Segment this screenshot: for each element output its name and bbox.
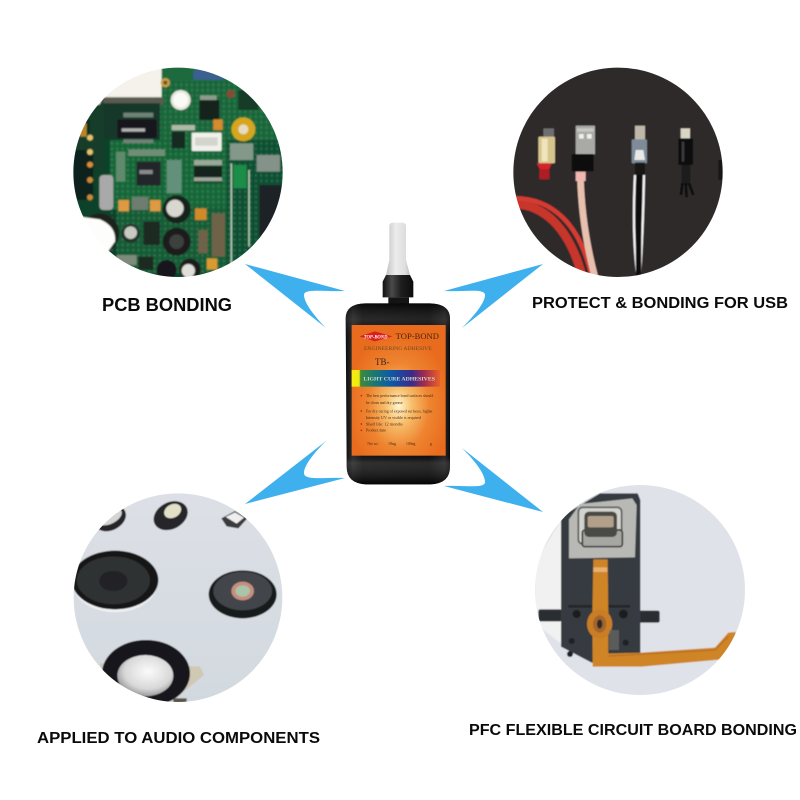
nozzle: [386, 223, 410, 275]
label subtitle: ENGINEERING ADHESIVE: [364, 347, 432, 352]
label bullets: Product date: [366, 429, 386, 433]
band title: LIGHT CURE ADHESIVES: [363, 377, 435, 383]
label logo: [359, 331, 392, 341]
photo circle: USB cables: [513, 68, 723, 277]
photo circle: PCB: [73, 68, 283, 277]
rainbow band: [352, 370, 440, 387]
arrow: to USB: [444, 264, 543, 328]
caption: USB: PROTECT & BONDING FOR USB: [532, 295, 788, 312]
label bullets: 100ng: [406, 442, 415, 446]
label bullets: be clean and dry grease: [366, 401, 403, 405]
bottle body: [346, 303, 450, 484]
label brand: TOP-BOND: [396, 332, 439, 341]
arrow: to PCB: [245, 264, 345, 328]
label bullets: Intensity UV or visible is required: [366, 416, 421, 420]
bottle neck: [388, 297, 409, 304]
orange label: [352, 325, 446, 456]
photo circle: audio components: [74, 494, 282, 702]
label bullets: For dry curing of exposed surfaces, higher: [366, 409, 433, 414]
caption: audio: APPLIED TO AUDIO COMPONENTS: [37, 730, 320, 747]
label model: TB-: [375, 357, 389, 367]
label bullets: [360, 394, 433, 446]
label logo: TOP-BOND: [364, 335, 388, 340]
caption: flexible circuit: PFC FLEXIBLE CIRCUIT BOARD BONDING: [469, 722, 797, 739]
arrow: to audio components: [245, 441, 345, 504]
screw cap: [383, 275, 413, 297]
label bullets: g: [430, 442, 432, 446]
arrow: to flexible circuit: [444, 448, 543, 512]
label bullets: The best performance bond surfaces should: [366, 394, 433, 398]
label bullets: Net wt.:: [367, 442, 379, 446]
photo circle: flexible circuit: [535, 485, 745, 695]
product bottle: [346, 223, 450, 484]
label bullets: Shelf life: 12 months: [366, 422, 403, 426]
caption: PCB: PCB BONDING: [102, 295, 232, 315]
body shine: [346, 303, 450, 484]
label bullets: 19ng: [388, 442, 396, 446]
